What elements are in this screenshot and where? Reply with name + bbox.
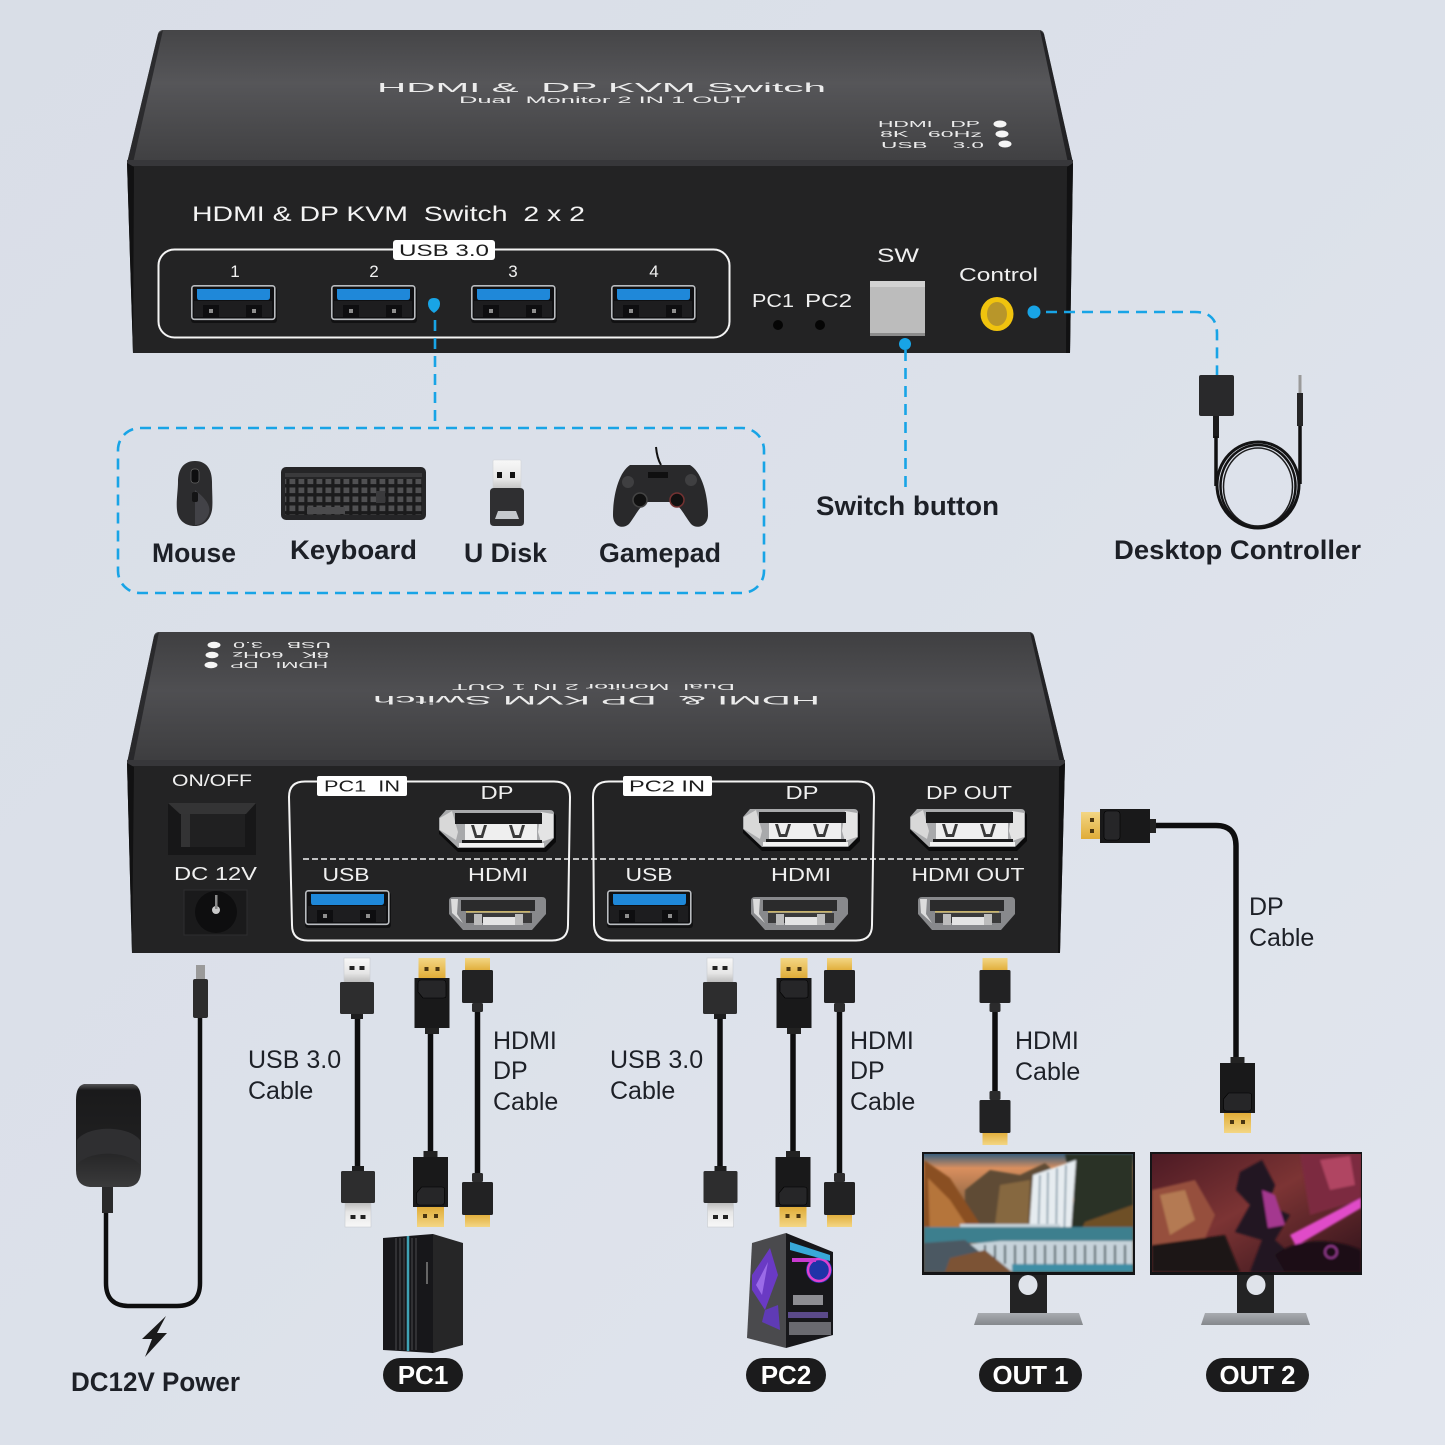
USB 3.0 group: 3 <box>508 262 518 281</box>
DP out cable <box>1081 809 1255 1133</box>
PC indicator labels: PC2 <box>805 291 852 311</box>
rear top face with inverted print: 8K 60Hz <box>232 650 329 659</box>
USB 3.0 group <box>158 240 730 338</box>
label: DP cable: DP <box>1249 893 1284 921</box>
device labels: Keyboard <box>290 535 417 565</box>
pill: OUT 1: OUT 1 <box>992 1360 1068 1390</box>
HDMI cable 2 <box>824 958 855 1227</box>
PC2 IN group: HDMI <box>771 865 831 885</box>
PC1 IN group: HDMI <box>468 865 528 885</box>
device: front view of KVM switch <box>127 30 1073 353</box>
label: HDMI cable: HDMI <box>1015 1027 1079 1055</box>
PC2 cables <box>703 958 855 1227</box>
label: power: DC12V Power <box>71 1367 240 1397</box>
monitor: OUT 1 <box>922 1152 1135 1325</box>
label: USB 3.0 cable 1: Cable <box>248 1077 313 1105</box>
rear top face with inverted print: USB 3.0 <box>232 640 331 649</box>
device labels: Gamepad <box>599 538 721 568</box>
PC1 IN group: USB <box>322 865 370 885</box>
USB 3.0 group: 1 <box>230 262 240 281</box>
control jack <box>959 265 1038 331</box>
callout line: USB ports to devices <box>428 298 440 428</box>
icon: lightning bolt <box>142 1316 167 1357</box>
output ports: HDMI OUT <box>912 865 1024 885</box>
label: HDMI DP cable 1: Cable <box>493 1088 558 1116</box>
label: HDMI DP cable 1: HDMI <box>493 1027 557 1055</box>
device top face with printed title: HDMI DP <box>878 120 980 129</box>
rear front face <box>127 763 1065 953</box>
label: HDMI DP cable 2: DP <box>850 1057 885 1085</box>
PC indicator labels: PC1 <box>752 291 794 311</box>
SW button <box>870 246 925 336</box>
PC1 tower <box>383 1234 463 1353</box>
rear top face with inverted print: HDMI & DP KVM Switch <box>373 693 820 707</box>
label: HDMI DP cable 2: HDMI <box>850 1027 914 1055</box>
PC2 tower <box>747 1233 833 1348</box>
DP cable 2 <box>776 958 812 1227</box>
power adapter and cable <box>76 965 208 1306</box>
pill: OUT 1 <box>979 1358 1082 1392</box>
rear top face with inverted print <box>127 632 1065 763</box>
PC2 IN group: PC2 IN <box>629 778 705 796</box>
pill: OUT 2 <box>1206 1358 1309 1392</box>
pill: OUT 2: OUT 2 <box>1220 1360 1296 1390</box>
pill: PC1: PC1 <box>398 1360 448 1390</box>
HDMI cable 1 <box>462 958 493 1227</box>
icon: desktop controller <box>1199 375 1303 528</box>
output ports <box>910 783 1027 930</box>
control jack: Control <box>959 265 1038 285</box>
label: USB 3.0 cable 1: USB 3.0 <box>248 1046 341 1074</box>
label: HDMI cable: Cable <box>1015 1058 1080 1086</box>
HDMI out cable <box>980 958 1010 1145</box>
pill: PC2: PC2 <box>761 1360 811 1390</box>
power switch <box>168 771 256 855</box>
PC1 IN group <box>289 776 570 940</box>
rear top face with inverted print: HDMI DP <box>230 660 328 669</box>
monitor: OUT 2 <box>1150 1152 1362 1325</box>
label: DP cable: Cable <box>1249 924 1314 952</box>
rear top face with inverted print: Dual Monitor 2 IN 1 OUT <box>452 682 735 691</box>
USB 3.0 group: 2 <box>369 262 379 281</box>
PC2 IN group <box>593 776 874 940</box>
USB 3.0 group: USB 3.0 <box>399 241 489 260</box>
PC1 IN group: PC1 IN <box>324 778 400 796</box>
device labels <box>152 535 721 568</box>
power switch: ON/OFF <box>172 771 252 790</box>
output ports: DP OUT <box>926 783 1012 803</box>
callout line: switch button <box>899 338 911 492</box>
device top face with printed title: 8K 60Hz <box>880 130 982 139</box>
icon: gamepad <box>613 447 708 527</box>
callout line: control jack to desktop controller <box>1028 306 1217 375</box>
icon: U disk <box>490 460 524 526</box>
device top face with printed title: USB 3.0 <box>881 141 986 150</box>
USB cable 2 <box>703 958 738 1227</box>
PC indicator labels <box>752 291 852 330</box>
front heading: HDMI & DP KVM Switch 2 x 2 <box>192 203 585 226</box>
DC jack <box>174 864 257 935</box>
USB cable 1 <box>340 958 375 1227</box>
label: switch button: Switch button <box>816 491 999 521</box>
USB 3.0 group: 4 <box>649 262 659 281</box>
device top face with printed title: Dual Monitor 2 IN 1 OUT <box>459 95 747 105</box>
pill: PC1 <box>383 1358 463 1392</box>
device top face with printed title: HDMI & DP KVM Switch <box>377 80 826 95</box>
device: rear view of KVM switch <box>127 632 1065 953</box>
DC jack: DC 12V <box>174 864 257 884</box>
device labels: Mouse <box>152 538 236 568</box>
label: desktop controller: Desktop Controller <box>1114 535 1361 565</box>
device top face with printed title <box>127 30 1073 163</box>
PC2 IN group: DP <box>786 783 818 803</box>
PC1 cables <box>340 958 493 1227</box>
SW button: SW <box>877 246 919 267</box>
DP cable 1 <box>413 958 450 1227</box>
pill: PC2 <box>746 1358 826 1392</box>
label: USB 3.0 cable 2: Cable <box>610 1077 675 1105</box>
icon: keyboard <box>281 467 426 520</box>
device front face <box>127 163 1073 353</box>
label: HDMI DP cable 1: DP <box>493 1057 528 1085</box>
label: HDMI DP cable 2: Cable <box>850 1088 915 1116</box>
panel: connected USB devices <box>118 428 764 593</box>
PC1 IN group: DP <box>480 783 514 803</box>
label: USB 3.0 cable 2: USB 3.0 <box>610 1046 703 1074</box>
PC2 IN group: USB <box>626 865 672 885</box>
icon: mouse <box>177 461 212 526</box>
device labels: U Disk <box>464 538 548 568</box>
